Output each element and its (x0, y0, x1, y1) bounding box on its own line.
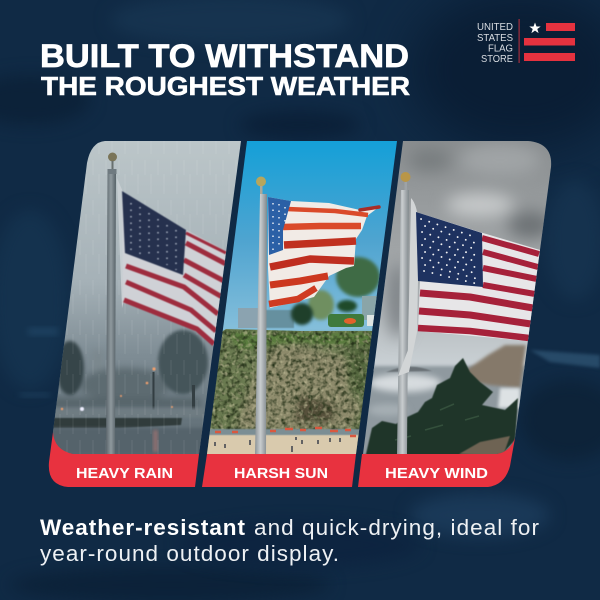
title (40, 38, 410, 101)
logo: United States Flag Store (477, 19, 575, 65)
panel: heavy wind (358, 141, 555, 487)
label: heavy rain: HEAVY RAIN (76, 465, 173, 482)
label: heavy wind: HEAVY WIND (385, 465, 488, 482)
label: harsh sun (202, 454, 356, 487)
sunny photo (200, 141, 400, 460)
title: THE ROUGHEST WEATHER (41, 71, 410, 101)
logo: United States Flag Store: FLAG (488, 44, 513, 55)
caption text: and quick-drying, ideal for (254, 515, 540, 540)
windy photo (360, 141, 555, 460)
caption text: Weather-resistant (40, 515, 246, 540)
flag (416, 212, 540, 341)
logo: United States Flag Store: STORE (481, 54, 513, 65)
caption text (40, 515, 540, 566)
pole (255, 176, 267, 454)
flag (268, 197, 379, 308)
title: BUILT TO WITHSTAND (40, 38, 409, 74)
wind-bent tree (366, 358, 518, 460)
label: heavy rain (49, 432, 199, 487)
label: harsh sun: HARSH SUN (234, 465, 328, 482)
logo: United States Flag Store: UNITED (477, 22, 513, 33)
pole (397, 172, 419, 454)
flag (122, 191, 226, 347)
caption text: year-round outdoor display. (40, 541, 339, 566)
pole (106, 152, 124, 454)
panel: harsh sun (200, 141, 400, 487)
logo: United States Flag Store: STATES (477, 33, 513, 44)
rain photo (40, 141, 245, 454)
label: heavy wind (358, 438, 515, 487)
buildings and trees (238, 257, 381, 328)
panel: heavy rain (40, 141, 245, 487)
